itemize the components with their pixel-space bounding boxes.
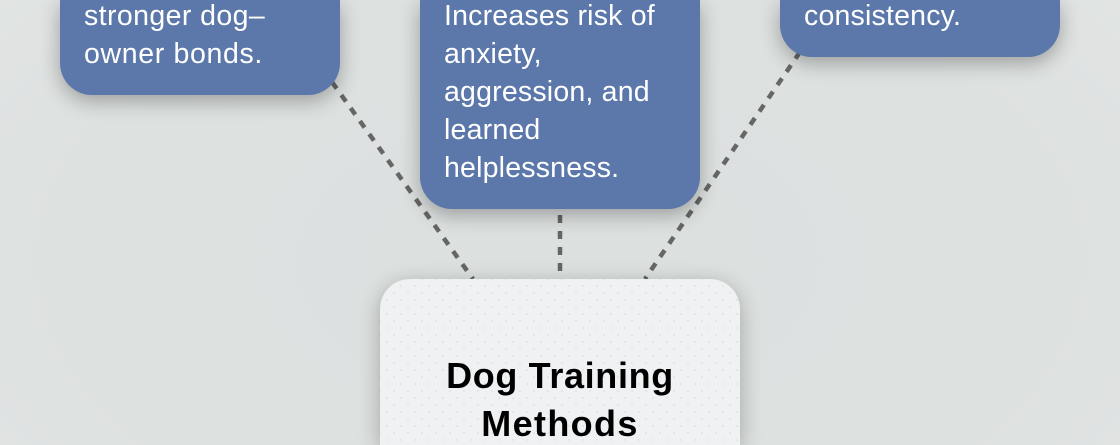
- text: left card: stronger dog–: [84, 0, 265, 32]
- text: middle card: helplessness.: [444, 152, 619, 184]
- panel: right card: [780, 0, 1060, 57]
- text: right card: consistency.: [804, 0, 961, 32]
- text: middle card: learned: [444, 114, 540, 146]
- text: middle card: anxiety,: [444, 38, 542, 70]
- title: Dog Training: [446, 355, 674, 396]
- panel: left card: [60, 0, 340, 95]
- text: middle card: aggression, and: [444, 76, 650, 108]
- text: left card: owner bonds.: [84, 38, 263, 70]
- text: middle card: Increases risk of: [444, 0, 655, 32]
- panel: middle card: [420, 0, 700, 209]
- title: [446, 355, 674, 444]
- text: left card: [84, 0, 265, 70]
- text: middle card: [444, 0, 655, 184]
- title: Methods: [481, 403, 639, 444]
- panel: central title card: [380, 279, 740, 445]
